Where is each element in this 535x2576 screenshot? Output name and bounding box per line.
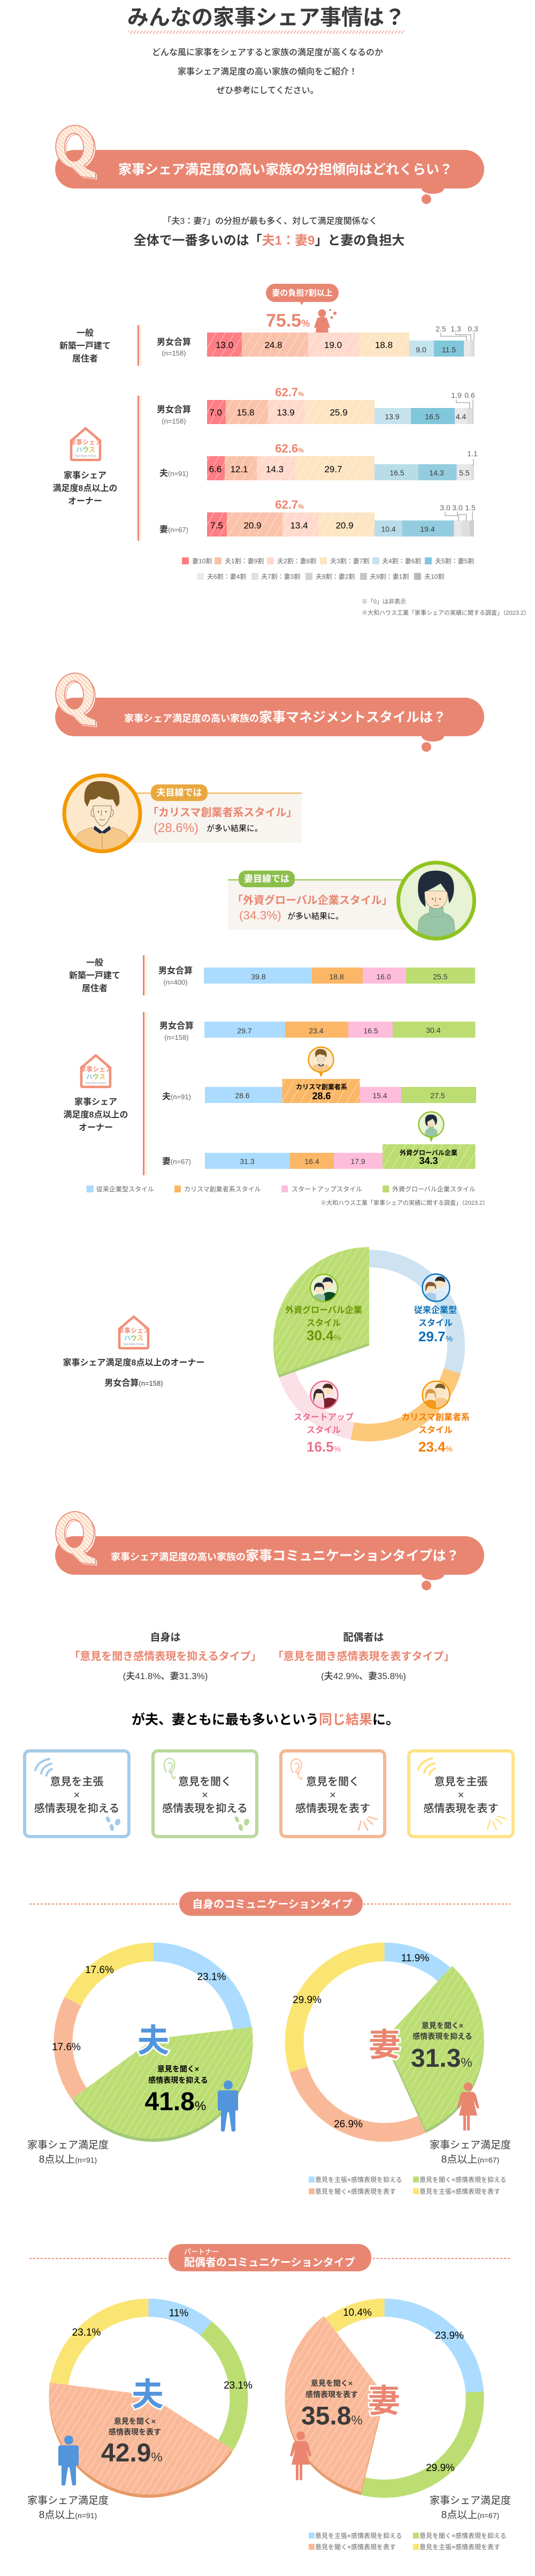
stacked bar: style, owners combined: 16.5 [363,1026,378,1035]
icon: woman [290,2431,311,2480]
stacked bar: owners, husband: 5.5 [459,469,470,477]
panel: wife perspective: 妻目線では [244,874,289,884]
legend: share ratios [182,557,474,580]
stacked bar: style, wife: 16.4 [304,1157,319,1166]
label: global style: スタイル [307,1318,341,1328]
donut chart: husband, partner type: 意見を聞く× [114,2417,156,2426]
donut chart: wife, own type: 26.9% [334,2119,363,2130]
donut chart: wife, partner type: 妻 [368,2383,400,2419]
label: charisma style: スタイル [418,1425,453,1435]
row labels: share chart: (n=158) [162,417,186,425]
finding text: 「夫3：妻7」の分担が最も多く、対して満足度関係なく [163,216,378,226]
stacked bar: general, combined: 18.8 [375,340,393,350]
group label: owners, style chart: オーナー [79,1123,113,1132]
heading: own communication type: 自身のコミュニケーションタイプ [192,1898,353,1910]
stacked bar: owners, combined: 4.4 [456,412,466,421]
icon: house logo: 家事シェア [118,1326,150,1334]
donut chart: husband, partner type: 11% [169,2308,188,2319]
stacked bar: style, husband: 15.4 [372,1091,387,1100]
label: startup style: スタートアップ [294,1412,354,1422]
group label: share-satisfied owners [53,396,142,541]
donut chart: wife, own type: 感情表現を抑える [412,2032,472,2041]
card: listen, restrain: 感情表現を抑える [162,1802,248,1815]
text block: spouse type: 「意見を聞き感情表現を表すタイプ」 [273,1650,455,1663]
legend: share ratios: 夫9割：妻1割 [370,573,409,580]
donut chart: wife, own type: 11.9% [401,1953,429,1964]
icon: husband marker [308,1047,334,1077]
stacked bar: style, wife: 外資グローバル企業 [400,1149,457,1157]
donut chart: husband, partner type: 感情表現を表す [109,2428,161,2436]
stacked bar: owners, wife: 10.4 [381,525,396,533]
stacked bar: style, general: 25.5 [433,972,448,981]
stacked bar: owners, wife [207,498,476,537]
stacked bar: owners, husband: 29.7 [324,464,342,474]
panel: husband perspective: (28.6%) [154,821,198,835]
stacked bar: style, husband: カリスマ創業者系 [296,1083,347,1091]
legend: share ratios: 夫4割：妻6割 [382,557,421,565]
icon: house logo: Kaji Share House [75,455,96,458]
stacked bar: style, owners combined: 30.4 [426,1026,441,1034]
group label: share-satisfied owners: オーナー [68,496,102,506]
group label: general homeowners: 居住者 [72,353,98,364]
panel: husband perspective: 「カリスマ創業者系スタイル」 [148,806,297,819]
group label: general homeowners [59,325,142,366]
legend: partner type: 意見を聞く×感情表現を抑える [419,2532,507,2540]
question banner: management style: 家事シェア満足度の高い家族の家事マネジメントスタイルは？ [124,710,446,725]
legend: own type: 意見を聞く×感情表現を表す [315,2187,396,2195]
callout: wife 70 percent or more [266,284,339,333]
legend: share ratios: 夫6割：妻4割 [207,573,246,580]
legend: styles: 従来企業型スタイル [96,1185,154,1193]
stacked bar: owners, wife: 20.9 [335,520,354,531]
stacked bar: owners, wife: 62.7% [275,498,304,511]
card: assert, express: × [458,1789,464,1801]
row labels: style chart: 妻(n=67) [162,1156,191,1166]
label: wife sample: 8点以上(n=67) [441,2509,499,2521]
heading: partner communication type: 配偶者のコミュニケーションタイプ [184,2256,355,2269]
row labels: style chart: 夫(n=91) [162,1091,191,1101]
intro text [152,47,383,95]
label: charisma style [401,1412,470,1455]
legend: own type: 意見を聞く×感情表現を抑える [419,2175,507,2184]
text block: self type [69,1631,262,1681]
legend: styles [87,1185,476,1193]
donut chart: husband, own type [27,1952,253,2165]
donut chart: husband, own type: 意見を聞く× [157,2065,199,2073]
stacked bar: owners, wife: 1.5 [465,503,476,512]
card: listen, restrain [153,1751,257,1837]
group label: general homeowners, style chart [69,955,147,995]
stacked bar: style, owners combined [204,1022,475,1038]
label: husband sample: 8点以上(n=91) [39,2154,97,2165]
row labels: style chart: 男女合算 [158,965,193,976]
label: owners combined: 家事シェア満足度8点以上のオーナー [63,1357,204,1368]
stacked bar: owners, wife: 3.0 [440,503,450,512]
icon: house logo: 家事シェア [70,438,102,446]
legend: share ratios: 夫1割：妻9割 [225,557,264,565]
question banner: division of housework: 家事シェア満足度の高い家族の分担傾向はどれくらい？ [118,162,453,177]
stacked bar: general, combined [207,324,478,357]
donut chart: husband, own type: 夫 [137,2023,169,2059]
icon: man [58,2435,79,2486]
donut chart: wife, own type [293,1952,511,2165]
stacked bar: style, general: 16.0 [376,972,391,981]
label: conventional style: スタイル [418,1318,453,1328]
donut chart: wife, partner type: 23.9% [435,2330,464,2341]
intro text: ぜひ参考にしてください。 [216,86,319,95]
legend: styles: 外資グローバル企業スタイル [392,1185,476,1193]
label: owners combined [63,1317,204,1388]
legend: share ratios: 夫8割：妻2割 [316,573,355,580]
icon: house logo: Kaji Share House [86,1082,106,1085]
donut chart: husband, partner type: 夫 [132,2377,164,2413]
row labels: share chart: 男女合算 [157,337,191,347]
icon: house logo [118,1317,150,1348]
panel: husband perspective: が多い結果に。 [207,824,263,833]
row labels: share chart: (n=158) [162,349,186,357]
result text: が夫、妻ともに最も多いという同じ結果に。 [132,1712,399,1727]
icon: couple, startup style [310,1381,338,1409]
text block: self type: (夫41.8%、妻31.3%) [123,1671,208,1681]
stacked bar: owners, wife: 13.4 [290,520,308,531]
stacked bar: general, combined: 19.0 [324,340,342,350]
label: husband sample: 8点以上(n=91) [39,2509,97,2521]
legend: partner type [309,2532,507,2551]
stacked bar: owners, combined: 7.0 [209,407,222,418]
label: wife sample: 8点以上(n=67) [441,2154,499,2165]
stacked bar: owners, wife: 20.9 [243,520,262,531]
row labels: style chart: (n=400) [163,978,188,986]
label: conventional style: 従来企業型 [414,1305,457,1315]
stacked bar: style, wife: 31.3 [240,1157,255,1166]
donut chart: husband, partner type: 42.9% [101,2439,163,2467]
label: startup style: スタイル [307,1425,341,1435]
donut chart: wife, own type: 29.9% [293,1995,322,2006]
source notes: ※「0」は非表示 [362,598,406,605]
row labels: style chart: 男女合算 [159,1021,194,1031]
legend: share ratios: 妻10割 [192,557,212,565]
panel: wife perspective: 「外資グローバル企業スタイル」 [232,894,393,906]
icon: woman [457,2082,479,2131]
group label: general homeowners: 一般 [77,328,94,338]
label: charisma style: 23.4% [418,1439,453,1455]
stacked bar: style, general [204,968,475,984]
label: husband sample: 家事シェア満足度 [27,2495,109,2506]
card: listen, restrain: × [202,1789,208,1801]
group label: general homeowners, style chart: 居住者 [82,983,108,993]
donut chart: wife, partner type: 29.9% [426,2462,455,2474]
label: global style: 外資グローバル企業 [285,1305,362,1315]
stacked bar: owners, combined: 16.5 [425,412,440,421]
card: assert, restrain [25,1751,129,1837]
stacked bar: style, husband [205,1047,476,1103]
stacked bar: owners, husband: 16.5 [389,469,404,477]
stacked bar: owners, combined: 1.9 [451,391,462,399]
row labels: share chart: 男女合算 [157,404,191,414]
donut chart: wife, partner type: 意見を聞く× [311,2379,353,2388]
panel: wife perspective: (34.3%) [239,909,281,922]
source notes [362,598,530,616]
group label: general homeowners, style chart: 新築一戸建て [69,970,120,980]
stacked bar: general, combined: 13.0 [216,340,233,350]
row labels: share chart: 夫(n=91) [159,468,188,478]
card: listen, express: 感情表現を表す [295,1802,370,1815]
card: assert, express [409,1751,513,1837]
card: listen, express: 意見を聞く [306,1776,360,1788]
donut chart: wife, partner type: 10.4% [343,2307,372,2318]
stacked bar: style, husband: 28.6 [235,1091,250,1100]
label: conventional style [414,1305,457,1344]
panel: husband perspective [63,774,302,853]
legend: share ratios: 夫10割 [424,573,444,580]
group label: general homeowners, style chart: 一般 [86,958,103,968]
stacked bar: owners, combined: 15.8 [236,407,255,418]
group label: share-satisfied owners: 家事シェア [64,470,106,480]
panel: wife perspective: が多い結果に。 [287,911,343,921]
row labels: style chart: (n=158) [164,1033,189,1041]
label: wife sample: 家事シェア満足度 [430,2139,511,2151]
stacked bar: owners, combined: 25.9 [330,407,348,418]
icon: couple, conventional style [422,1274,450,1302]
legend: partner type: 意見を主張×感情表現を抑える [315,2532,402,2540]
legend: styles: カリスマ創業者系スタイル [184,1185,261,1193]
stacked bar: owners, husband: 62.6% [275,442,304,455]
label: conventional style: 29.7% [418,1328,453,1344]
icon: house logo: ハウス [124,1334,143,1342]
donut chart: wife, partner type [285,2307,511,2521]
icon: house logo [80,1055,112,1087]
legend: partner type: 意見を聞く×感情表現を表す [315,2543,396,2551]
stacked bar: general, combined: 9.0 [416,345,426,354]
donut chart: husband, partner type: 23.1% [224,2380,253,2391]
stacked bar: style, wife [205,1112,475,1169]
icon: house logo [70,428,102,460]
stacked bar: owners, husband: 6.6 [209,464,221,474]
row labels: share chart: 妻(n=67) [159,524,188,534]
stacked bar: owners, wife: 7.5 [210,520,223,531]
donut chart: wife, partner type: 35.8% [301,2402,363,2430]
card: listen, restrain: 意見を聞く [178,1776,232,1788]
legend: share ratios: 夫5割：妻5割 [435,557,474,565]
stacked bar: general, combined: 1.3 [450,324,461,333]
question banner: communication type: 家事シェア満足度の高い家族の家事コミュニケーションタイプは？ [111,1548,460,1563]
stacked bar: owners, wife: 3.0 [452,503,463,512]
question banner: division of housework [55,126,484,204]
finding text [134,216,404,248]
legend: own type [309,2175,507,2195]
text block: spouse type [273,1631,455,1681]
source notes: ※大和ハウス工業「家事シェアの実績に関する調査」（2023.2） [362,609,530,616]
group label: share-satisfied owners: 満足度8点以上の [53,483,117,493]
group label: owners, style chart [64,1012,147,1175]
stacked bar: owners, husband [207,442,478,480]
label: startup style: 16.5% [307,1439,341,1455]
card: assert, express: 感情表現を表す [424,1802,499,1815]
stacked bar: general, combined: 11.5 [442,345,456,354]
stacked bar: general, combined: 24.8 [264,340,282,350]
stacked bar: owners, combined [207,386,475,424]
text block: self type: 自身は [150,1631,181,1643]
intro text: どんな風に家事をシェアすると家族の満足度が高くなるのか [152,47,383,57]
card: listen, express: × [330,1789,336,1801]
card: assert, express: 意見を主張 [434,1776,488,1788]
stacked bar: style, wife: 34.3 [419,1155,438,1166]
card: listen, express [281,1751,385,1837]
legend: own type: 意見を主張×感情表現を抑える [315,2175,402,2184]
label: husband sample: 家事シェア満足度 [27,2139,109,2151]
label: wife sample: 家事シェア満足度 [430,2495,511,2506]
donut chart: husband, own type: 41.8% [144,2088,206,2116]
label: charisma style: カリスマ創業者系 [401,1412,470,1422]
stacked bar: owners, combined: 0.6 [464,391,475,399]
icon: house logo: ハウス [76,446,95,454]
stacked bar: style, owners combined: 29.7 [237,1026,252,1035]
icon: house logo: Kaji Share House [124,1343,144,1346]
stacked bar: owners, combined: 62.7% [275,386,304,399]
stacked bar: owners, husband: 14.3 [429,469,444,477]
legend: partner type: 意見を主張×感情表現を表す [419,2543,500,2551]
text block: spouse type: 配偶者は [343,1631,384,1643]
stacked bar: general, combined: 2.5 [435,324,446,333]
stacked bar: owners, husband: 12.1 [230,464,248,474]
stacked bar: style, general: 18.8 [329,972,344,981]
icon: couple, global style [310,1274,338,1302]
callout: wife 70 percent or more: 妻の負担7割以上 [272,288,333,298]
donut chart: husband, own type: 23.1% [197,1971,226,1983]
stacked bar: owners, wife: 19.4 [420,525,435,533]
stacked bar: general, combined: 0.3 [468,324,478,333]
stacked bar: style, husband: 27.5 [430,1091,445,1100]
stacked bar: owners, combined: 13.9 [385,412,400,421]
label: startup style [294,1412,354,1455]
stacked bar: style, general: 39.8 [251,972,266,981]
text block: spouse type: (夫42.9%、妻35.8%) [321,1671,406,1681]
legend: share ratios: 夫3割：妻7割 [330,557,369,565]
intro text: 家事シェア満足度の高い家族の傾向をご紹介！ [178,67,357,77]
stacked bar: style, owners combined: 23.4 [309,1026,324,1035]
panel: wife perspective [228,861,476,940]
stacked bar: style, wife: 17.9 [350,1157,365,1166]
donut chart: husband, own type: 感情表現を抑える [148,2076,208,2084]
label: owners combined: 男女合算(n=158) [104,1378,163,1388]
heading: partner communication type [29,2244,511,2271]
donut chart: husband, partner type [27,2308,253,2521]
icon: house logo: 家事シェア [80,1065,112,1073]
group label: owners, style chart: 家事シェア [74,1097,117,1107]
stacked bar: owners, husband: 1.1 [467,449,478,458]
donut chart: wife, own type: 意見を聞く× [422,2021,463,2030]
group label: owners, style chart: 満足度8点以上の [64,1109,128,1120]
source note: styles: ※大和ハウス工業「家事シェアの実績に関する調査」（2023.2） [320,1199,488,1206]
title: みんなの家事シェア事情は？ [127,6,406,29]
row labels: style chart [158,965,194,1166]
stacked bar: owners, husband: 14.3 [266,464,284,474]
label: husband sample [27,2139,109,2165]
donut chart: husband, own type: 17.6% [52,2042,81,2053]
donut chart: husband, own type: 17.6% [85,1965,114,1976]
label: husband sample [27,2495,109,2521]
stacked bar: owners, combined: 13.9 [277,407,295,418]
card: assert, restrain: 感情表現を抑える [34,1802,119,1815]
icon: house logo: ハウス [86,1073,105,1081]
label: wife sample [430,2495,511,2521]
legend: own type: 意見を主張×感情表現を表す [419,2187,500,2195]
legend: share ratios: 夫2割：妻8割 [277,557,316,565]
donut chart: wife, own type: 31.3% [411,2044,472,2073]
icon: wife marker [418,1112,444,1142]
text block: self type: 「意見を聞き感情表現を抑えるタイプ」 [69,1650,262,1663]
label: wife sample [430,2139,511,2165]
donut chart: wife, own type: 妻 [369,2027,401,2063]
icon: couple, charisma style [422,1381,450,1409]
question banner: communication type [55,1512,484,1590]
icon: man [218,2081,238,2132]
group label: general homeowners: 新築一戸建て [59,341,111,351]
legend: styles: スタートアップスタイル [292,1185,362,1193]
row labels: share chart [157,337,191,534]
donut chart: husband, partner type: 23.1% [72,2327,101,2338]
finding text: 全体で一番多いのは「夫1：妻9」と妻の負担大 [134,233,404,248]
question banner: management style [55,674,484,752]
heading: own communication type [29,1892,511,1916]
donut chart: wife, partner type: 感情表現を表す [305,2390,358,2399]
legend: share ratios: 夫7割：妻3割 [261,573,300,580]
label: global style [285,1305,362,1343]
label: global style: 30.4% [307,1327,341,1343]
callout: wife 70 percent or more: 75.5% [266,311,310,331]
card: assert, restrain: 意見を主張 [50,1776,104,1788]
donut chart: management styles [273,1247,470,1455]
card: assert, restrain: × [74,1789,80,1801]
heading: partner communication type: パートナー [184,2248,219,2256]
panel: husband perspective: 夫目線では [156,788,202,798]
stacked bar: style, husband: 28.6 [312,1091,331,1101]
